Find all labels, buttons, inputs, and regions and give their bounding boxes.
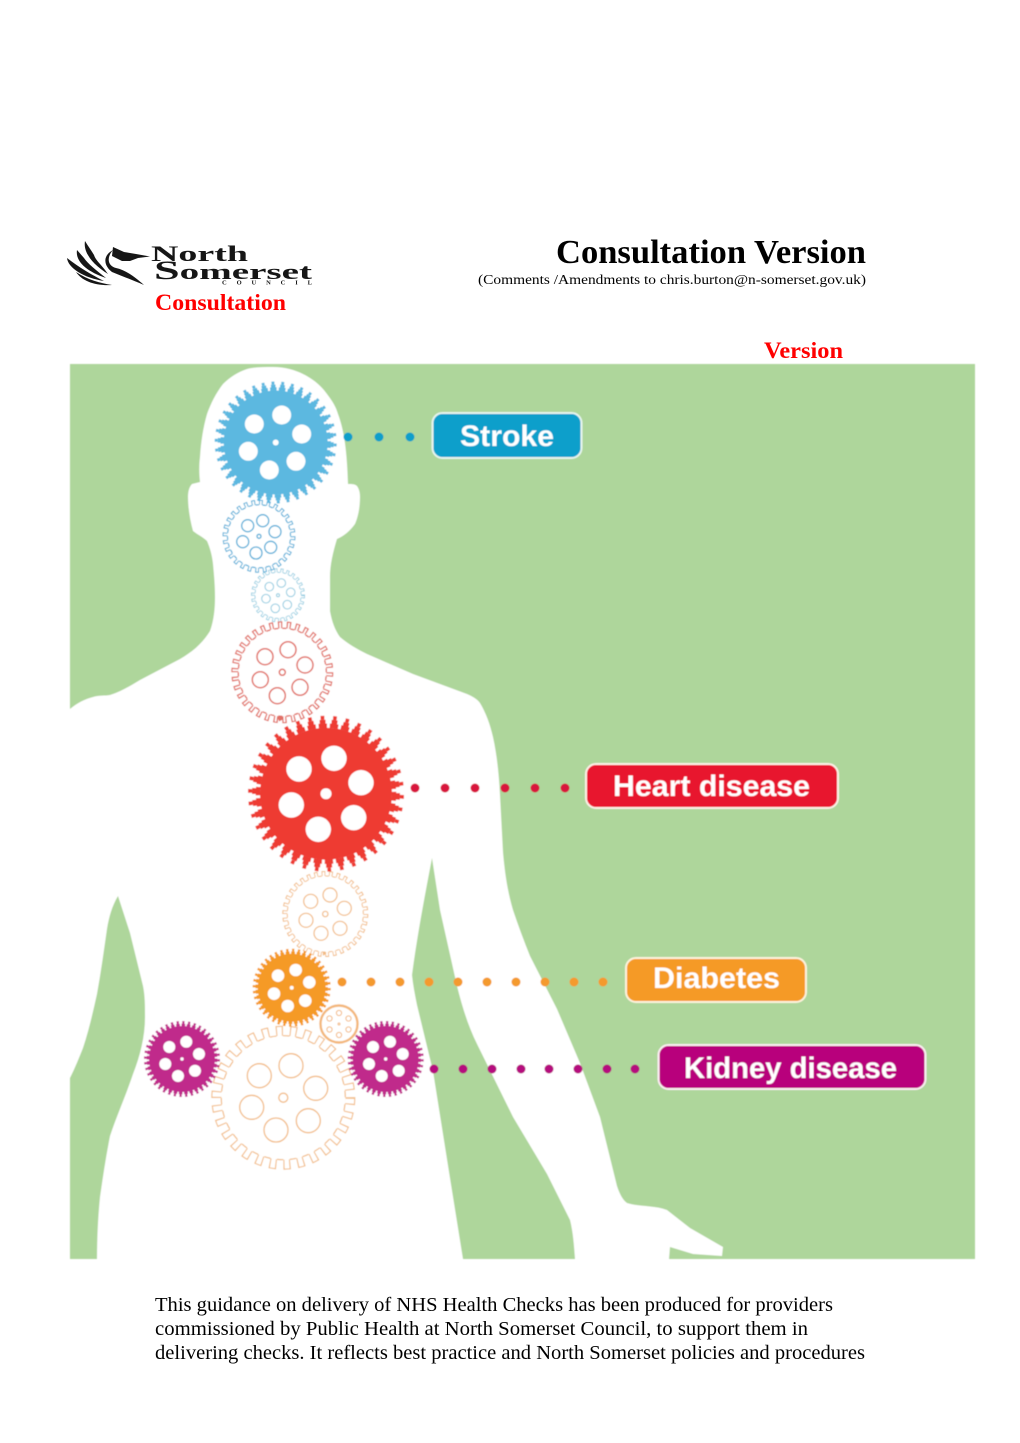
gear: solid purple right (kidney disease): [349, 1022, 422, 1096]
gear: solid orange (diabetes): [254, 950, 329, 1025]
gear: solid purple left: [146, 1022, 218, 1096]
dotted connector: kidney disease: [430, 1064, 640, 1074]
label: Heart disease: [586, 764, 838, 808]
logo wordmark Council: COUNCIL: [222, 280, 313, 286]
gear: pale blue outline: [253, 570, 303, 620]
body text paragraph: This guidance on delivery of NHS Health Checks has been produced for providers: [155, 1294, 833, 1316]
label: Stroke: Stroke: [460, 420, 554, 453]
label: Kidney disease: Kidney disease: [684, 1052, 897, 1085]
gear: small orange outline: [319, 1004, 359, 1044]
contact line: (Comments /Amendments to chris.burton@n-somerset.gov.uk): [478, 273, 866, 288]
gear: solid blue (stroke): [216, 383, 335, 502]
gear: solid red (heart disease): [250, 718, 402, 870]
gear: red outline: [235, 625, 330, 720]
body text paragraph: commissioned by Public Health at North Somerset Council, to support them in: [155, 1318, 808, 1340]
red label: Consultation: Consultation: [155, 290, 286, 316]
green background: [70, 364, 975, 1259]
body text paragraph: [155, 1294, 865, 1364]
dotted connector: stroke: [344, 432, 414, 442]
dotted connector: diabetes: [338, 978, 608, 986]
logo: North Somerset Council: [67, 241, 313, 286]
label: Diabetes: [626, 958, 806, 1002]
panel: body illustration: [70, 364, 975, 1259]
gear: pale orange outline: [285, 874, 366, 954]
label: Heart disease: Heart disease: [613, 770, 810, 803]
gear: blue outline: [225, 502, 293, 570]
dotted connector: heart disease: [410, 784, 570, 792]
human body silhouette: [70, 367, 723, 1259]
title: Consultation Version: [556, 234, 866, 271]
logo wordmark North: North: [151, 241, 248, 266]
label: Diabetes: Diabetes: [653, 962, 780, 995]
logo wordmark Somerset: S omerset: [154, 256, 313, 285]
label: Kidney disease: [658, 1045, 926, 1089]
label: Stroke: [432, 413, 582, 458]
gear: large pale orange outline: [216, 1031, 350, 1165]
body text paragraph: delivering checks. It reflects best practice and North Somerset policies and procedures: [155, 1342, 865, 1364]
red label: Version: Version: [764, 338, 843, 364]
icon: winged dragon emblem: [67, 241, 150, 285]
